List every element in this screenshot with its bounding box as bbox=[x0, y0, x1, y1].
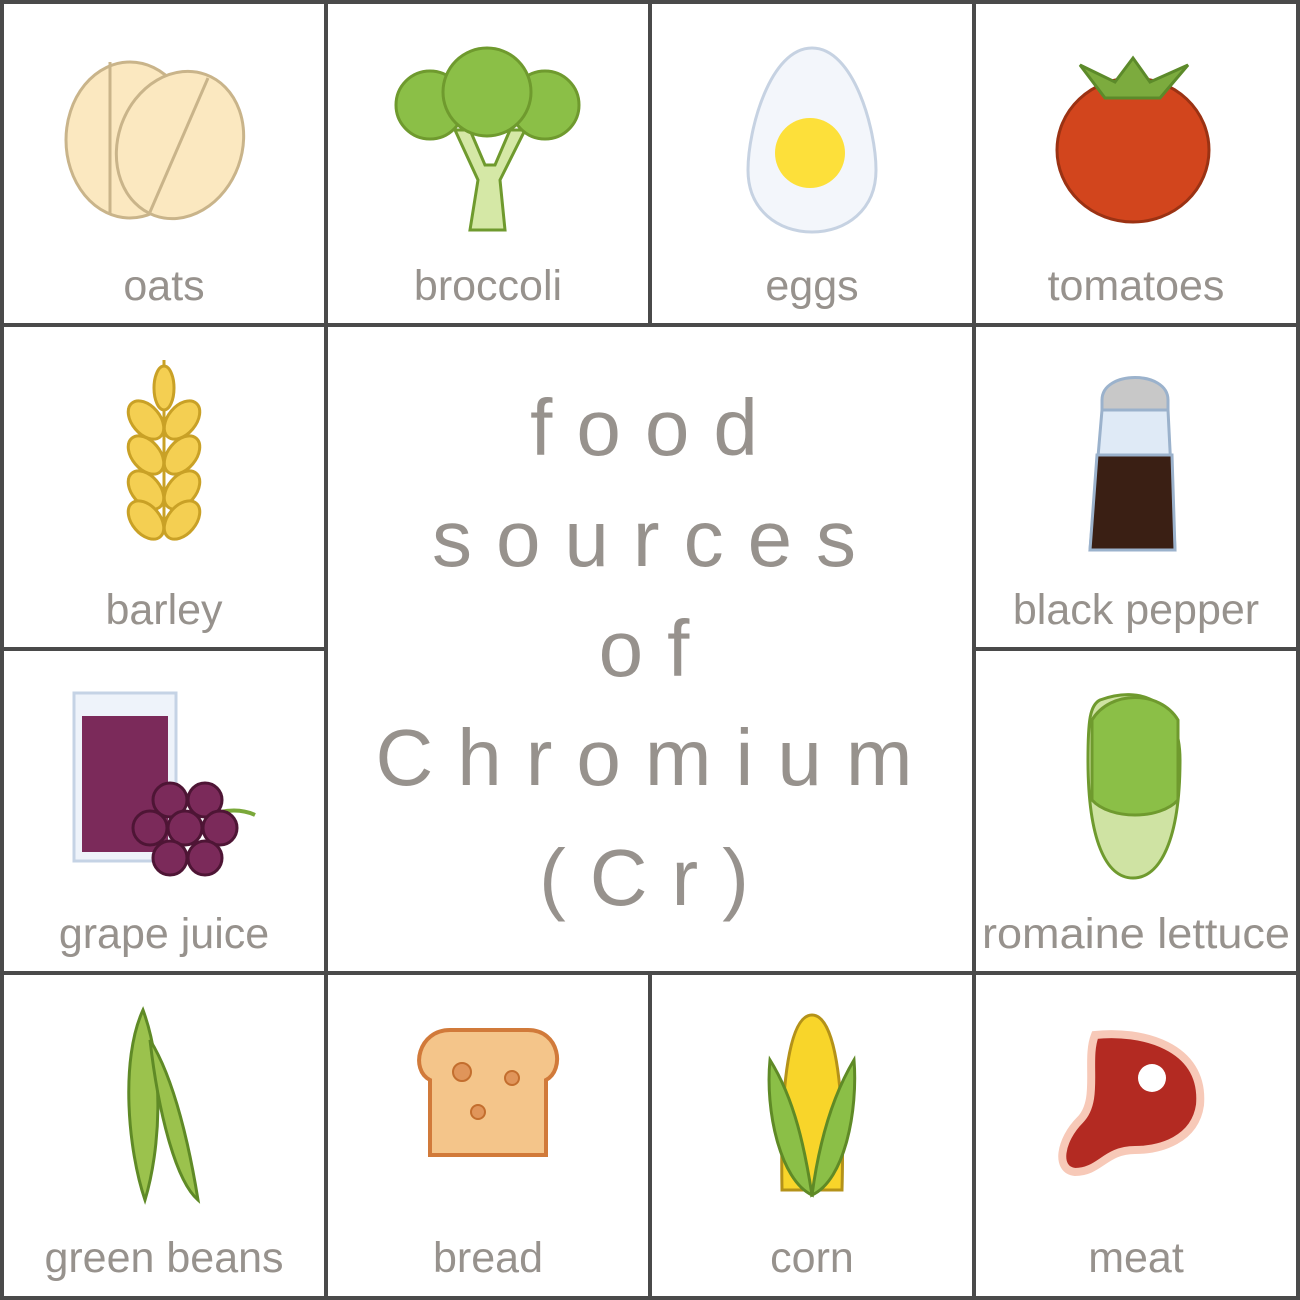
icon: bread bbox=[419, 1030, 557, 1155]
icon: meat bbox=[1062, 1034, 1200, 1172]
labels: barley bbox=[105, 586, 223, 634]
icon: broccoli bbox=[396, 48, 579, 230]
labels: grape juice bbox=[59, 910, 269, 958]
title: Chromium bbox=[376, 713, 936, 802]
labels: romaine lettuce bbox=[982, 910, 1290, 958]
labels: corn bbox=[770, 1234, 854, 1282]
title bbox=[376, 383, 936, 922]
icon: pepper shaker bbox=[1090, 378, 1175, 550]
title: food bbox=[530, 383, 782, 472]
labels: bread bbox=[433, 1234, 543, 1282]
icon: barley bbox=[121, 360, 207, 546]
icon: tomato bbox=[1057, 58, 1209, 222]
labels: meat bbox=[1088, 1234, 1184, 1282]
title: sources bbox=[432, 494, 880, 583]
title: (Cr) bbox=[539, 833, 773, 922]
labels: broccoli bbox=[414, 262, 562, 310]
icon: grape juice bbox=[74, 693, 255, 875]
labels: green beans bbox=[44, 1234, 284, 1282]
icon: green beans bbox=[129, 1010, 198, 1200]
labels: eggs bbox=[765, 262, 859, 310]
labels: oats bbox=[123, 262, 205, 310]
labels: tomatoes bbox=[1048, 262, 1224, 310]
icon: corn bbox=[769, 1015, 855, 1195]
labels: black pepper bbox=[1013, 586, 1259, 634]
title: of bbox=[599, 604, 713, 693]
icon: romaine lettuce bbox=[1088, 695, 1180, 878]
icon: egg bbox=[748, 48, 876, 232]
labels bbox=[44, 262, 1290, 1282]
icon: oats bbox=[66, 53, 264, 237]
